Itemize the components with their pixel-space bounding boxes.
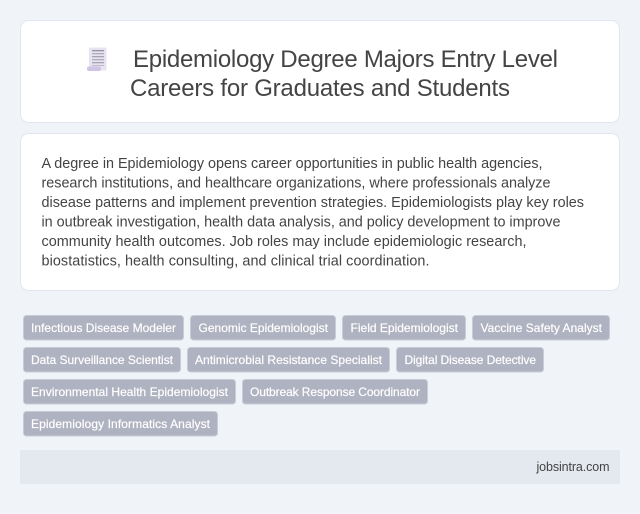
title xyxy=(130,46,558,102)
tag: Infectious Disease Modeler xyxy=(24,316,184,340)
description text: biostatistics, health consulting, and clinical trial coordination. xyxy=(42,254,430,270)
tag: Field Epidemiologist xyxy=(342,316,466,340)
tag: Digital Disease Detective xyxy=(396,348,544,372)
description text: in outbreak investigation, health data analysis, and policy development to improve xyxy=(42,214,560,230)
career tags xyxy=(24,316,610,436)
tag: Environmental Health Epidemiologist: Environmental Health Epidemiologist xyxy=(31,385,229,399)
tag: Genomic Epidemiologist xyxy=(190,316,336,340)
icon: document scroll xyxy=(87,48,106,71)
tag: Antimicrobial Resistance Specialist: Antimicrobial Resistance Specialist xyxy=(195,353,383,367)
description panel xyxy=(20,134,620,290)
tag: Field Epidemiologist: Field Epidemiologist xyxy=(350,321,459,335)
tag: Epidemiology Informatics Analyst: Epidemiology Informatics Analyst xyxy=(31,417,211,431)
description text: A degree in Epidemiology opens career opportunities in public health agencies, xyxy=(42,156,542,172)
title: Epidemiology Degree Majors Entry Level xyxy=(133,46,558,73)
tag: Epidemiology Informatics Analyst xyxy=(24,412,218,436)
footer bar xyxy=(20,450,620,484)
tag: Genomic Epidemiologist: Genomic Epidemiologist xyxy=(198,321,329,335)
tag: Data Surveillance Scientist xyxy=(24,348,180,372)
tag: Infectious Disease Modeler: Infectious Disease Modeler xyxy=(31,321,176,335)
tag: Data Surveillance Scientist: Data Surveillance Scientist xyxy=(31,353,174,367)
title: Careers for Graduates and Students xyxy=(130,75,510,102)
description text xyxy=(42,156,584,270)
footer source text: jobsintra.com xyxy=(536,460,610,474)
tag: Outbreak Response Coordinator: Outbreak Response Coordinator xyxy=(250,385,420,399)
description text: research institutions, and healthcare organizations, where professionals analyze xyxy=(42,176,550,192)
tag: Antimicrobial Resistance Specialist xyxy=(188,348,390,372)
description text: disease patterns and implement prevention strategies. Epidemiologists play key roles xyxy=(42,195,584,211)
description text: community health outcomes. Job roles may include epidemiologic research, xyxy=(42,234,526,250)
tag: Digital Disease Detective: Digital Disease Detective xyxy=(404,353,536,367)
tag: Vaccine Safety Analyst: Vaccine Safety Analyst xyxy=(480,321,603,335)
tag: Vaccine Safety Analyst xyxy=(472,316,610,340)
tag: Outbreak Response Coordinator xyxy=(242,380,428,404)
header panel xyxy=(20,20,620,122)
tag: Environmental Health Epidemiologist xyxy=(24,380,236,404)
